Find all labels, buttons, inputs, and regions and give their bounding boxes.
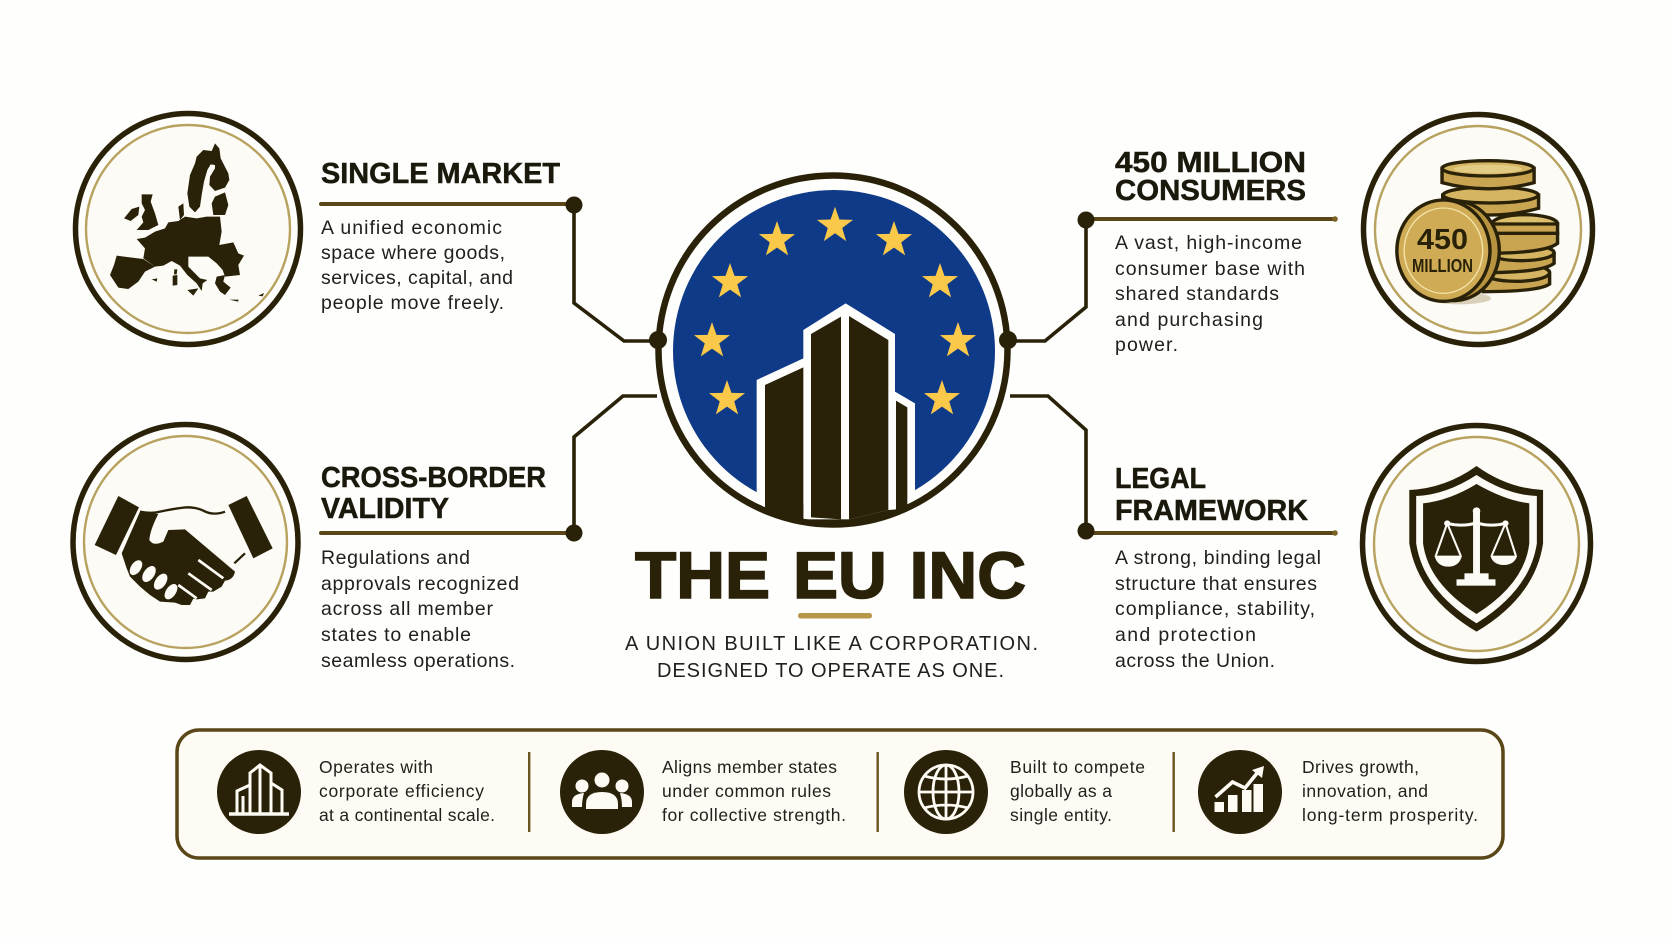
text: under common rules [662, 781, 831, 801]
icon: handshake [73, 424, 298, 660]
connector: cross-border validity to logo [321, 396, 657, 542]
icon: stack of gold coins [1364, 114, 1592, 344]
text: for collective strength. [662, 805, 846, 825]
panel: cross-border validity [73, 424, 546, 672]
panel: legal framework [1115, 426, 1590, 672]
title: THE EU INC [635, 538, 1026, 612]
text: innovation, and [1302, 781, 1428, 801]
text: Drives growth, [1302, 757, 1419, 777]
item: global competition [904, 750, 1145, 834]
panel: 450 million consumers [1115, 114, 1592, 356]
heading: 450 million consumers [1115, 147, 1306, 207]
logo: EU corporate emblem [649, 175, 1017, 530]
heading: legal framework: FRAMEWORK [1115, 495, 1308, 527]
heading: legal framework: LEGAL [1115, 463, 1206, 495]
icon: group of people [560, 750, 644, 834]
text: single market description: A unified economic [321, 217, 502, 239]
text: 450 million description: shared standards [1115, 283, 1279, 305]
subtitle: A UNION BUILT LIKE A CORPORATION. [625, 633, 1038, 655]
subtitle [625, 633, 1038, 682]
heading: cross-border validity: VALIDITY [321, 493, 449, 525]
subtitle: DESIGNED TO OPERATE AS ONE. [657, 660, 1004, 682]
text: legal framework description: structure that ensures [1115, 573, 1317, 595]
text: globally as a [1010, 781, 1112, 801]
connector: legal framework to logo [1010, 396, 1338, 540]
text: cross-border validity description: Regulations and [321, 547, 470, 569]
icon: stack of gold coins: MILLION [1412, 256, 1473, 276]
text: single market description: people move freely. [321, 292, 504, 314]
panel: central logo [625, 175, 1038, 682]
text: cross-border validity description: across all member [321, 598, 494, 620]
item: growth [1198, 750, 1478, 834]
text: legal framework description: compliance, stability, [1115, 598, 1315, 620]
text: at a continental scale. [319, 805, 495, 825]
icon: blue disc [673, 190, 995, 512]
text [662, 757, 846, 825]
item: corporate efficiency [217, 750, 495, 834]
text: 450 million description: consumer base with [1115, 258, 1305, 280]
text: single entity. [1010, 805, 1112, 825]
icon: buildings [217, 750, 301, 834]
text: long-term prosperity. [1302, 805, 1478, 825]
text: legal framework description [1115, 547, 1321, 672]
text: single market description [321, 217, 513, 314]
text: single market description: services, capital, and [321, 267, 513, 289]
heading: 450 million consumers: 450 MILLION [1115, 147, 1306, 179]
text: cross-border validity description: seamless operations. [321, 650, 515, 672]
heading: cross-border validity: CROSS-BORDER [321, 462, 546, 494]
text: 450 million description: power. [1115, 334, 1178, 356]
text: 450 million description: A vast, high-income [1115, 232, 1302, 254]
text [319, 757, 495, 825]
text: cross-border validity description: approvals recognized [321, 573, 519, 595]
connector: single market to logo [321, 196, 658, 341]
icon: stack of gold coins: 450 [1417, 224, 1468, 256]
icon: skyscraper silhouette [757, 303, 915, 530]
heading: cross-border validity [321, 462, 546, 525]
text: cross-border validity description [321, 547, 519, 672]
gold divider [798, 613, 872, 618]
item: common rules [560, 750, 846, 834]
icon: ring of stars [694, 207, 976, 414]
panel: single market [76, 114, 560, 344]
text: legal framework description: and protection [1115, 624, 1256, 646]
text: Aligns member states [662, 757, 837, 777]
text: 450 million description: and purchasing [1115, 309, 1263, 331]
connector: 450 million consumers to logo [1008, 212, 1338, 341]
text: cross-border validity description: states to enable [321, 624, 471, 646]
heading: 450 million consumers: CONSUMERS [1115, 175, 1306, 207]
text [1010, 757, 1145, 825]
icon: growth chart [1198, 750, 1282, 834]
infographic canvas [70, 110, 1596, 860]
text: single market description: space where goods, [321, 242, 505, 264]
text: Built to compete [1010, 757, 1145, 777]
icon: globe [904, 750, 988, 834]
text: 450 million description [1115, 232, 1305, 356]
text: legal framework description: A strong, binding legal [1115, 547, 1321, 569]
text: Operates with [319, 757, 433, 777]
heading: legal framework [1115, 463, 1308, 527]
text: legal framework description: across the Union. [1115, 650, 1275, 672]
text: corporate efficiency [319, 781, 484, 801]
icon: europe map [76, 114, 300, 344]
panel: bottom benefits bar [177, 730, 1503, 858]
text [1302, 757, 1478, 825]
icon: shield with scales [1362, 426, 1590, 662]
heading: single market: SINGLE MARKET [321, 158, 560, 190]
